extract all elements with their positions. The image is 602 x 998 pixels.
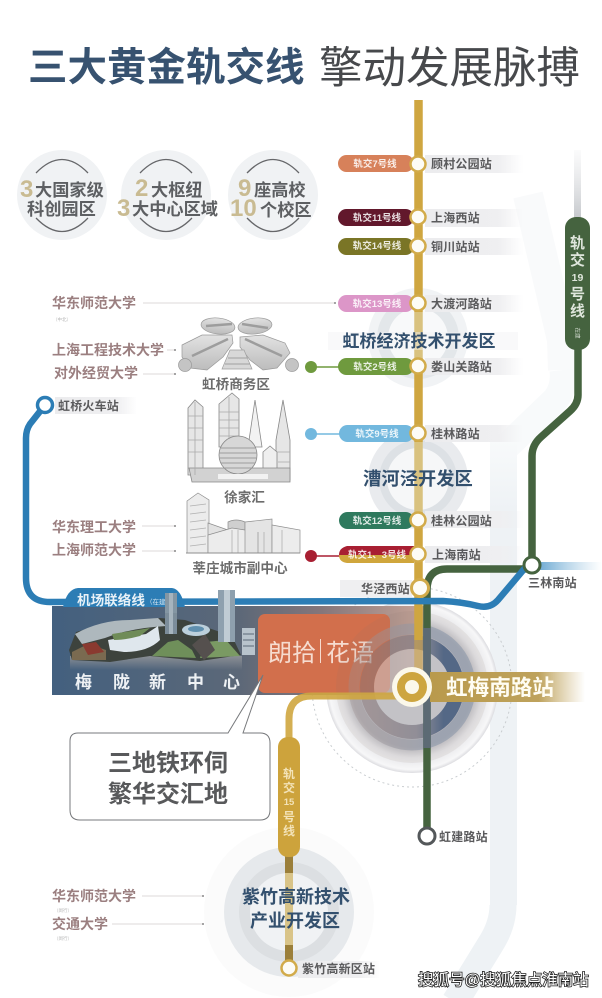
line 19 label: 轨 <box>570 234 585 252</box>
stat badges <box>17 150 318 240</box>
badge: hubs and centres: 2 <box>135 175 148 202</box>
callout: 三地铁环伺 <box>108 750 228 777</box>
station: zizhu hi-tech <box>282 960 380 978</box>
label: ecnu: 华东师范大学 <box>52 295 136 311</box>
badge: universities <box>228 150 318 240</box>
row: line 11: 上海西站 <box>431 210 480 225</box>
row: line 9: 桂林路站 <box>431 426 480 441</box>
zone label: hongqiao economic: 虹桥经济技术开发区 <box>342 331 496 351</box>
university labels <box>52 295 336 942</box>
label: ecust <box>52 519 176 535</box>
row: line 13: 大渡河路站 <box>431 296 492 311</box>
badge: hubs and centres: 大枢纽 <box>151 180 203 200</box>
label: ecnu minhang: 华东师范大学 <box>52 888 136 904</box>
badge: national parks <box>17 150 107 240</box>
badge: hubs and centres <box>117 150 218 240</box>
label: shnu <box>52 542 176 558</box>
label: ecust: 华东理工大学 <box>52 519 136 535</box>
line: metro 15 <box>278 696 400 965</box>
row: lines 1 and 3: 上海南站 <box>432 547 481 562</box>
hub rings: hongmei south road <box>336 611 488 763</box>
orange project block: 朗拾 <box>268 640 316 667</box>
station: hongqiao railway: 虹桥火车站 <box>58 398 119 413</box>
airport link label: 机场联络线 <box>77 592 145 608</box>
callout: 繁华交汇地 <box>108 780 228 808</box>
label: ecnu minhang <box>52 888 204 914</box>
line 19 label: 在建 <box>574 327 582 339</box>
line: gold trunk <box>414 100 423 672</box>
panel caption: 陇 <box>113 673 130 692</box>
airport link label <box>63 588 185 608</box>
row: huajingxi station: 华泾西站 <box>361 581 410 596</box>
zone label: zizhu: 紫竹高新技术 <box>242 886 350 907</box>
row: line 9: 轨交9号线 <box>355 428 399 440</box>
hub station: hongmei south road <box>392 667 585 707</box>
line 15 label <box>278 737 300 857</box>
label: ecnu minhang: （闵行） <box>54 907 72 914</box>
row: line 14: 轨交14号线 <box>353 240 402 252</box>
label: ecnu: （中北） <box>53 316 71 323</box>
row: line 12: 桂林公园站 <box>431 513 492 528</box>
label: sues: 上海工程技术大学 <box>52 342 164 358</box>
zone rings: zizhu <box>204 827 374 997</box>
aerial city illustration <box>69 590 255 670</box>
panel caption: 梅 <box>75 673 92 692</box>
panel caption: 新 <box>149 672 166 692</box>
row: line 12 <box>339 511 523 529</box>
background transit band <box>455 195 563 998</box>
badge: national parks: 大国家级 <box>35 180 104 200</box>
landmark: xinzhuang sub-centre <box>186 493 300 576</box>
badge: hubs and centres: 大中心区域 <box>132 199 218 219</box>
badge: universities: 10 <box>230 195 257 222</box>
panel caption: 心 <box>223 673 240 692</box>
station: hongjian road: 虹建路站 <box>439 829 488 844</box>
zone rings: caohejing <box>368 429 468 529</box>
title: 擎动发展脉搏 <box>319 45 580 93</box>
zone label: zizhu <box>242 886 350 931</box>
badge: universities: 9 <box>238 175 251 202</box>
station: sanlin south: 三林南站 <box>528 575 577 590</box>
zone rings: hongqiao <box>368 288 468 388</box>
row: line 2 <box>305 358 523 375</box>
row: line 11: 轨交11号线 <box>353 212 402 224</box>
badge: universities: 座高校 <box>254 180 306 200</box>
line 19 label: 交 <box>570 251 585 269</box>
line: airport link <box>26 405 602 608</box>
row: huajingxi station <box>340 580 428 597</box>
watermark: 搜狐号@搜狐焦点淮南站 <box>418 971 589 989</box>
title: 三大黄金轨交线 <box>28 46 304 90</box>
station: hongqiao railway <box>38 397 137 414</box>
panel: meilong new centre <box>52 590 427 695</box>
row: lines 1 and 3 <box>305 546 523 563</box>
towers over the airport link <box>165 590 235 613</box>
station: zizhu hi-tech: 紫竹高新区站 <box>302 961 375 976</box>
landmark name: 徐家汇 <box>224 489 265 505</box>
line 15 label: 轨 <box>283 766 295 781</box>
station rows <box>305 155 523 597</box>
line 19 label: 19 <box>572 272 583 284</box>
label: sjtu <box>52 916 204 942</box>
hub disc: hongmei south road <box>312 587 512 787</box>
line 15 label: 15 <box>284 797 295 808</box>
line 19 label <box>565 217 590 350</box>
line 15 label: 线 <box>283 823 295 838</box>
row: line 9 <box>305 425 523 442</box>
row: line 2: 轨交2号线 <box>353 361 397 373</box>
row: line 14: 铜川站站 <box>431 239 480 254</box>
callout <box>70 675 270 820</box>
airport link label: （在建） <box>146 597 172 606</box>
badge: national parks: 科创园区 <box>27 199 96 219</box>
orange project block: 花语 <box>326 640 374 667</box>
label: ecnu <box>52 295 336 323</box>
line 19 label: 号 <box>570 286 585 303</box>
line 15 label: 号 <box>283 810 295 824</box>
label: shnu: 上海师范大学 <box>52 542 136 558</box>
station: hongjian road <box>419 828 488 844</box>
label: sjtu: （闵行） <box>54 935 72 942</box>
line: metro 19 <box>427 150 590 832</box>
row: line 11 <box>338 209 523 227</box>
badge: universities: 个校区 <box>260 200 312 220</box>
landmark name: 莘庄城市副中心 <box>192 560 288 576</box>
orange project block <box>258 614 390 693</box>
zone label: zizhu: 产业开发区 <box>250 910 340 931</box>
badge: hubs and centres: 3 <box>117 195 130 222</box>
label: suibe <box>54 365 176 381</box>
row: line 7: 轨交7号线 <box>353 158 397 170</box>
landmark: hongqiao business district <box>178 316 298 392</box>
label: sjtu: 交通大学 <box>52 916 108 932</box>
panel caption: 中 <box>187 673 204 692</box>
row: line 14 <box>338 238 523 255</box>
line 19 label: 线 <box>570 302 585 320</box>
row: line 12: 轨交12号线 <box>353 515 402 527</box>
row: line 13 <box>338 295 523 312</box>
zone label: caohejing: 漕河泾开发区 <box>363 468 473 489</box>
badge: national parks: 3 <box>20 176 33 203</box>
line 15 label: 交 <box>283 780 295 795</box>
label: suibe: 对外经贸大学 <box>54 365 138 381</box>
row: line 7: 顾村公园站 <box>431 156 492 171</box>
row: lines 1 and 3: 轨交1、3号线 <box>348 549 407 561</box>
row: line 7 <box>338 155 523 173</box>
row: line 13: 轨交13号线 <box>353 298 402 310</box>
title <box>28 45 580 93</box>
landmark: xujiahui <box>188 393 290 505</box>
hub station: hongmei south road: 虹梅南路站 <box>446 675 554 700</box>
station: sanlin south <box>524 557 577 590</box>
landmark name: 虹桥商务区 <box>202 376 270 392</box>
row: line 2: 娄山关路站 <box>431 359 492 374</box>
